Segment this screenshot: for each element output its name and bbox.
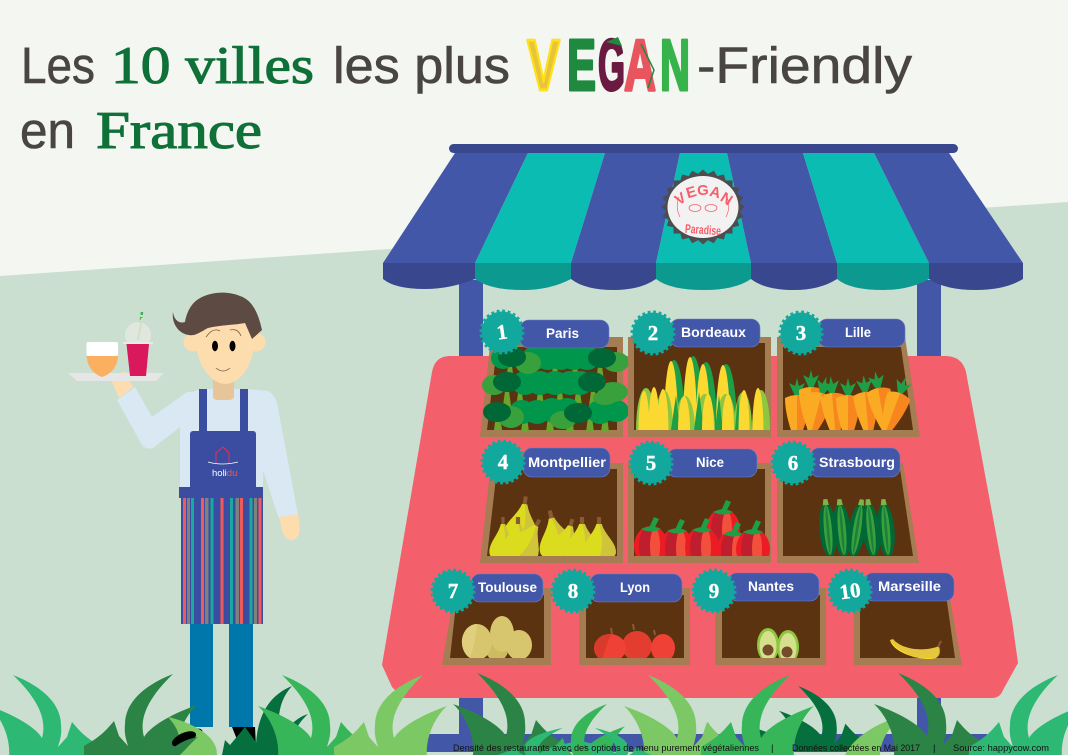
grass [0,673,1068,755]
rank 7 Toulouse: Toulouse [478,580,537,595]
footer source note: | [933,743,935,754]
clump far right [969,675,1068,755]
face [195,318,255,384]
rank 5 Nice: Nice [696,455,724,470]
vegan vegetable lettering: V [527,26,560,106]
rank 1 Paris [481,311,609,353]
title: 10 villes [111,37,314,95]
rank 10 Marseille: 10 [838,578,862,604]
city labels and rank badges [432,311,954,612]
shirt [117,387,298,519]
clump center left [258,675,371,755]
dark tuft at legs [222,727,275,755]
awning stripes [383,153,1023,263]
rank 10 Marseille: Marseille [878,579,942,594]
rank 4 Montpellier: 4 [498,450,509,474]
title: en [20,102,75,159]
ears [184,332,266,352]
rank 9 Nantes: 9 [709,579,719,603]
eyebrows and smile [206,330,241,371]
vegan paradise seal: E [684,183,698,202]
zucchini [817,498,897,558]
vegan paradise seal: A [708,183,723,202]
holidu logo: holidu [212,468,237,479]
vegan vegetable lettering: N [660,26,690,106]
rank 9 Nantes [693,570,819,612]
awning scallops [383,263,1023,290]
tray [68,373,164,381]
small light tuft [705,722,735,755]
title: France [96,102,262,160]
rank 5 Nice [630,442,757,484]
title: -Friendly [697,37,913,94]
rank 6 Strasbourg: Strasbourg [819,455,895,470]
rank 5 Nice: 5 [646,451,656,475]
rank 4 Montpellier [482,441,610,483]
rank 1 Paris: Paris [546,326,579,341]
free hand [280,514,300,540]
legs [190,620,253,727]
rank 2 Bordeaux: Bordeaux [681,325,746,340]
back dark grass [256,686,869,755]
market table [382,356,1018,698]
vegan paradise seal: G [697,182,709,199]
footer source note: | [771,743,773,754]
title: Les [21,37,95,94]
rank 7 Toulouse: 7 [448,579,458,603]
front teal tufts [492,728,657,755]
clump dark right [874,673,987,755]
footer source note: Densité des restaurants avec des options de menu purement végétaliennes [453,743,759,754]
neck [213,380,234,400]
rank 3 Lille [780,312,905,354]
rank 9 Nantes: Nantes [748,579,794,594]
apron belt [179,487,263,498]
pears [489,496,616,556]
clump small green [540,704,625,755]
clump light [334,675,447,755]
small light clump near shoes [168,717,217,755]
clump dark middle [453,673,566,755]
footer source note: Données collectées en Mai 2017 [792,743,920,754]
rank 8 Lyon: Lyon [620,580,650,595]
clump bright right [701,675,814,755]
crate 3 Lille [777,337,920,445]
rank 8 Lyon: 8 [568,579,578,603]
vegan paradise seal: N [717,189,735,209]
apron bib [190,431,256,491]
title: les plus [333,37,510,94]
shoes [169,724,256,752]
footer source note: Source: happycow.com [953,743,1049,754]
clump far left [0,675,102,755]
wine glass [86,342,118,377]
rank 3 Lille: Lille [845,325,871,340]
waiter [68,293,300,752]
rank 10 Marseille [829,570,954,612]
rank 2 Bordeaux: 2 [648,321,658,345]
apron stripes [183,498,262,624]
vegan vegetable lettering: E [567,26,596,106]
carrots [785,370,912,430]
crate 4 Montpellier [480,463,623,565]
clump light middle [624,675,737,755]
vegan paradise seal: Paradise [685,222,721,238]
crate 5 Nice [628,463,771,571]
rank 1 Paris: 1 [495,319,509,345]
clump left dark [84,674,197,755]
broccoli [482,346,629,432]
vegan paradise seal: V [672,189,689,209]
left shoe front [170,728,198,750]
hair [173,293,262,339]
rank 6 Strasbourg [772,442,900,484]
awning rail [449,144,958,153]
banana [890,639,941,659]
holidu logo [208,447,238,479]
crate 6 Strasbourg [777,463,919,563]
footer source note [453,743,1049,754]
avocados [757,628,799,658]
crate 8 Lyon [579,588,690,665]
rank 3 Lille: 3 [796,321,806,345]
title [20,26,913,160]
rank 2 Bordeaux [632,312,760,354]
dark blade near shoe [165,737,198,755]
rank 8 Lyon [552,570,682,612]
eyes [212,341,236,351]
apron skirt [181,497,263,624]
apron straps [199,389,248,433]
crate 2 Bordeaux [628,337,771,437]
vegan vegetable lettering: G [598,26,625,106]
rank 6 Strasbourg: 6 [788,451,798,475]
rank 7 Toulouse [432,570,543,612]
light tuft right [845,716,902,755]
corn [636,356,770,430]
crate 1 Paris [480,337,629,437]
awning [383,144,1023,290]
vegan paradise seal [661,169,745,245]
vegan vegetable lettering: A [624,26,656,106]
apples [594,624,675,658]
rank 4 Montpellier: Montpellier [528,455,607,470]
crate 7 Toulouse [442,588,551,665]
peppers [634,500,770,556]
tray hand [112,372,133,398]
crate 9 Nantes [715,588,826,665]
smoothie cup [123,312,153,376]
apron [179,389,263,624]
crate 10 Marseille [854,588,962,665]
vegan vegetable lettering [527,26,690,106]
potatoes [462,616,532,661]
stall posts [418,280,987,752]
